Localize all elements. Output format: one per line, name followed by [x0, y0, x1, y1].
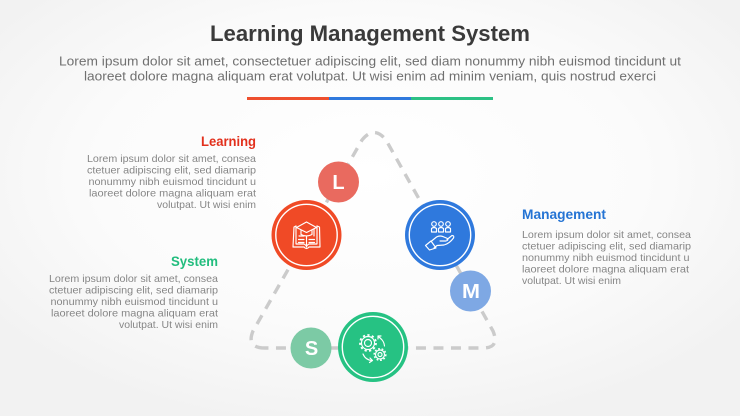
circle badge: L: L	[332, 172, 345, 194]
heading: Management: Management	[522, 206, 606, 222]
icon circle: management hand with people	[405, 200, 475, 270]
body: Learning: ctetuer adipiscing elit, sed diamarip	[87, 164, 256, 176]
body: System: Lorem ipsum dolor sit amet, consea	[49, 273, 218, 285]
circle badge: S	[290, 328, 332, 368]
body: Management: nonummy nibh euismod tincidunt u	[522, 252, 690, 264]
circle badge: M: M	[462, 281, 480, 303]
circle badge: L	[318, 162, 359, 202]
title: Learning Management System	[210, 21, 530, 46]
body: System: volutpat. Ut wisi enim	[119, 319, 218, 331]
body: Management: ctetuer adipiscing elit, sed diamarip	[522, 240, 691, 252]
subtitle text: Lorem ipsum dolor sit amet, consectetuer adipiscing elit, sed diam nonummy nibh euismod tincidunt ut	[59, 54, 682, 68]
text block: System	[49, 253, 218, 331]
text block: Management	[522, 206, 691, 287]
body: Learning: nonummy nibh euismod tincidunt u	[88, 176, 256, 188]
heading: System: System	[171, 253, 218, 269]
body: Learning: Lorem ipsum dolor sit amet, consea	[87, 153, 256, 165]
body: System	[49, 273, 218, 331]
text block: Learning	[87, 133, 256, 211]
dashed triangle path	[251, 132, 495, 348]
body: System: laoreet dolore magna aliquam erat	[51, 308, 218, 320]
body: Management	[522, 229, 691, 287]
heading: Learning: Learning	[201, 133, 256, 149]
body: Learning	[87, 153, 256, 211]
body: System: ctetuer adipiscing elit, sed diamarip	[49, 284, 218, 296]
body: System: nonummy nibh euismod tincidunt u	[50, 296, 218, 308]
subtitle text: laoreet dolore magna aliquam erat volutpat. Ut wisi enim ad minim veniam, quis nostrud exerci	[84, 70, 656, 84]
icon circle: learning book	[272, 200, 342, 270]
body: Learning: volutpat. Ut wisi enim	[157, 199, 256, 211]
subtitle text	[59, 54, 682, 84]
body: Management: laoreet dolore magna aliquam erat	[522, 264, 689, 276]
circle badge: M	[450, 270, 491, 312]
body: Management: volutpat. Ut wisi enim	[522, 275, 621, 287]
circle badge: S: S	[305, 338, 318, 360]
tricolor divider	[247, 97, 493, 100]
body: Management: Lorem ipsum dolor sit amet, consea	[522, 229, 691, 241]
body: Learning: laoreet dolore magna aliquam erat	[89, 188, 256, 200]
icon circle: system gears	[338, 312, 408, 382]
